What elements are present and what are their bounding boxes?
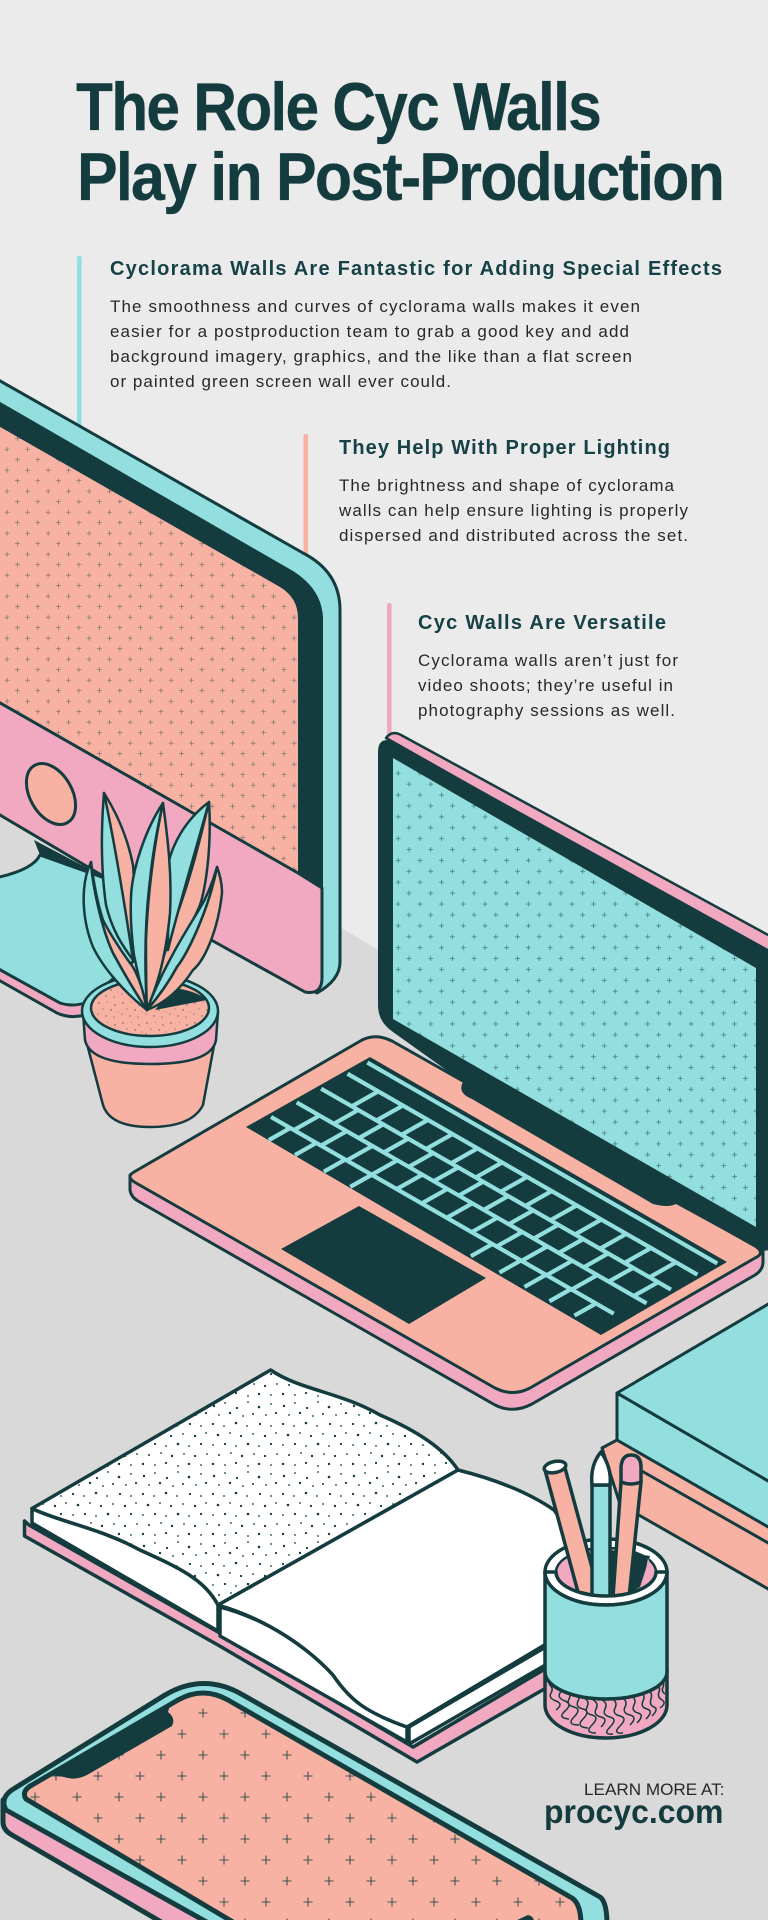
section 3 body: Cyclorama walls aren’t just for bbox=[418, 651, 678, 670]
section 1: special effects bbox=[77, 256, 722, 436]
lower book bbox=[602, 1440, 768, 1590]
section 1 heading: Cyclorama Walls Are Fantastic for Adding Special Effects bbox=[110, 258, 722, 280]
pencil pink eraser bbox=[613, 1455, 641, 1597]
section 2 accent bar bbox=[304, 434, 308, 564]
laptop lid rim bbox=[386, 733, 768, 955]
section 2 body bbox=[338, 476, 688, 545]
illustration: open notebook bbox=[24, 1370, 620, 1762]
monitor stand bbox=[0, 840, 135, 1017]
laptop base top bbox=[130, 1037, 760, 1392]
phone screen bbox=[24, 1693, 581, 1920]
notebook page block side bbox=[409, 1627, 580, 1744]
pot body bbox=[86, 1040, 215, 1127]
keyboard keys bbox=[250, 1063, 717, 1330]
notebook cover bbox=[24, 1521, 560, 1762]
title bbox=[76, 69, 723, 215]
phone side bbox=[3, 1800, 260, 1920]
cup rim bbox=[545, 1539, 667, 1605]
section 1 body: background imagery, graphics, and the like than a flat screen bbox=[110, 347, 632, 366]
illustration: pencil cup bbox=[543, 1452, 667, 1738]
plant leaves bbox=[84, 793, 222, 1010]
illustration: desktop monitor bbox=[0, 378, 340, 1017]
cup interior bbox=[556, 1548, 656, 1596]
laptop bezel bbox=[378, 740, 768, 1251]
section 2 body: dispersed and distributed across the set. bbox=[339, 526, 688, 545]
phone frame bbox=[4, 1684, 607, 1920]
illustration: laptop bbox=[130, 733, 768, 1409]
notebook right edge bbox=[220, 1607, 407, 1742]
illustration: stacked books bbox=[602, 1303, 768, 1590]
upper book side bbox=[617, 1393, 768, 1528]
monitor logo bbox=[16, 755, 86, 833]
section 2 body: The brightness and shape of cyclorama bbox=[339, 476, 675, 495]
pencil teal bbox=[592, 1452, 610, 1597]
section 1 accent bar bbox=[77, 256, 82, 436]
section 2 heading: They Help With Proper Lighting bbox=[339, 437, 670, 459]
section 3 heading: Cyc Walls Are Versatile bbox=[418, 612, 666, 634]
website: procyc.com bbox=[544, 1793, 724, 1830]
learn more label: LEARN MORE AT: bbox=[584, 1781, 724, 1799]
notebook left edge bbox=[32, 1508, 218, 1631]
section 1 body: easier for a postproduction team to grab a good key and add bbox=[110, 322, 629, 341]
section 2: lighting bbox=[304, 434, 688, 564]
section 3 body: video shoots; they’re useful in bbox=[418, 676, 673, 695]
cup pink base bbox=[545, 1670, 667, 1738]
pot rim bbox=[82, 975, 218, 1047]
section 3 body bbox=[418, 651, 678, 720]
cup front rim bbox=[545, 1572, 667, 1605]
section 1 body bbox=[110, 297, 640, 391]
illustration: smartphone bbox=[3, 1684, 607, 1920]
soil bbox=[91, 980, 209, 1036]
section 3 accent bar bbox=[387, 603, 392, 743]
illustration: potted plant bbox=[82, 793, 222, 1127]
section 3 body: photography sessions as well. bbox=[418, 701, 675, 720]
left page bbox=[32, 1370, 458, 1605]
keyboard bbox=[246, 1057, 727, 1335]
cup teal body bbox=[545, 1572, 667, 1699]
pencil salmon bbox=[543, 1459, 600, 1597]
section 1 body: The smoothness and curves of cyclorama walls makes it even bbox=[110, 297, 640, 316]
monitor casing bbox=[0, 378, 340, 993]
right page bbox=[218, 1470, 620, 1727]
phone notch bbox=[52, 1705, 173, 1779]
laptop base side bbox=[130, 1175, 763, 1409]
trackpad bbox=[281, 1206, 486, 1324]
pot band bbox=[83, 1012, 218, 1064]
monitor bezel bbox=[0, 399, 323, 890]
title: The Role Cyc Walls bbox=[76, 69, 600, 145]
monitor screen bbox=[0, 424, 298, 874]
section 3: versatile bbox=[387, 603, 678, 743]
section 1 body: or painted green screen wall ever could. bbox=[110, 372, 451, 391]
monitor chin bbox=[0, 700, 322, 992]
upper book cover bbox=[617, 1303, 768, 1482]
phone lower notch bbox=[512, 1915, 534, 1920]
footer call to action bbox=[544, 1781, 724, 1830]
cup squiggles bbox=[549, 1680, 665, 1734]
section 2 body: walls can help ensure lighting is properly bbox=[338, 501, 688, 520]
desk surface bbox=[0, 723, 768, 1920]
laptop screen bbox=[393, 758, 756, 1227]
